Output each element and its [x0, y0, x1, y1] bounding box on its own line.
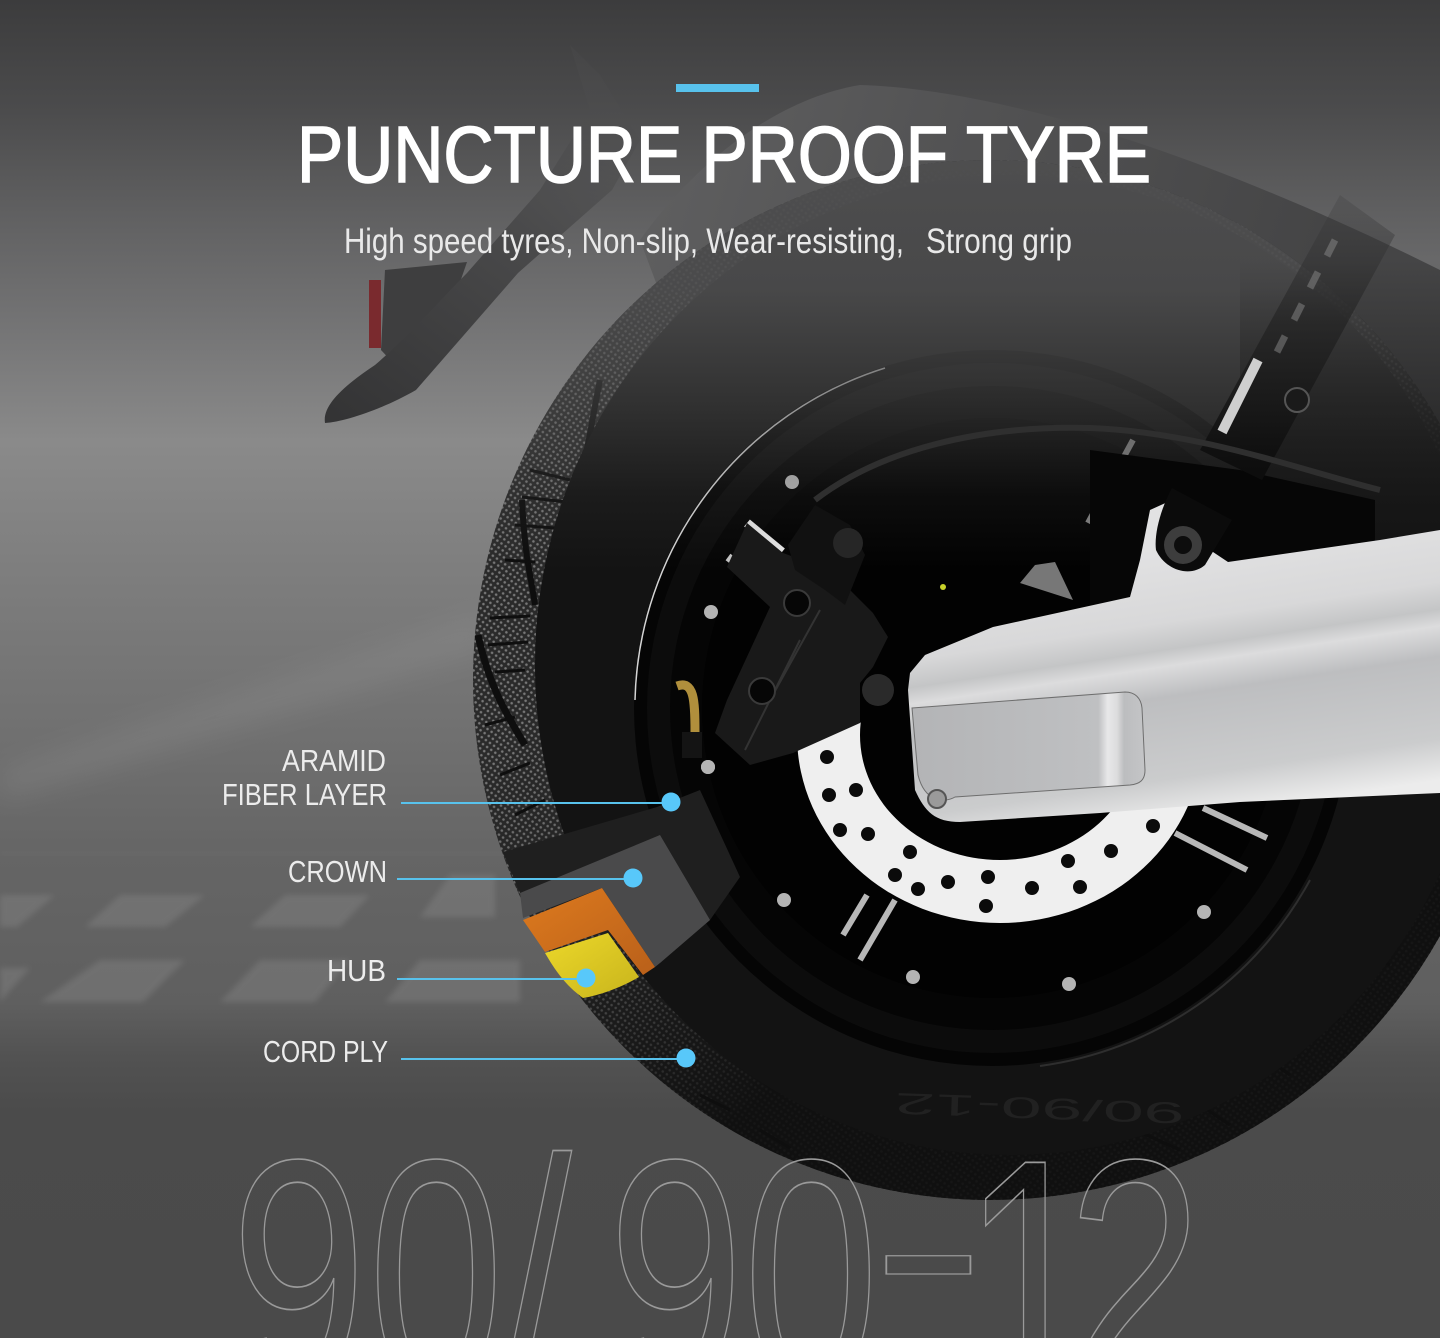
- callout: crown: [288, 854, 642, 889]
- tyre sidewall: [535, 175, 1440, 1155]
- mudguard and tail light: [325, 45, 640, 423]
- brake caliper: [701, 505, 894, 774]
- dark frame area right of shock: [1240, 260, 1440, 560]
- inner wedge: [1020, 562, 1073, 600]
- wheel: [473, 160, 1440, 1200]
- outlined tyre size: [231, 1130, 1203, 1338]
- accent bar: [676, 84, 759, 92]
- brake disc: [798, 722, 1188, 923]
- callout: aramid fiber layer: [222, 743, 680, 812]
- callout: aramid fiber layer: FIBER LAYER: [222, 777, 387, 812]
- frame body behind tyre: [640, 85, 1440, 620]
- rim: [634, 350, 1350, 1066]
- rim highlight arc: [635, 368, 885, 700]
- sidewall marking: 90/90-12: [894, 1086, 1185, 1129]
- callout: hub: [327, 953, 596, 988]
- swingarm cover plate: [912, 692, 1145, 800]
- tread grooves: [478, 380, 1390, 1150]
- sensor: [940, 584, 946, 590]
- swingarm: [908, 488, 1440, 822]
- top fade over tyre: [473, 160, 1440, 1200]
- tyre with tread: [473, 160, 1440, 1200]
- rim bolts: [701, 475, 1211, 991]
- callout: aramid fiber layer: ARAMID: [282, 743, 386, 778]
- black gap above swingarm: [1090, 450, 1375, 610]
- tyre cross-section layers: [503, 790, 740, 998]
- swingarm mount bolt: [1156, 488, 1232, 571]
- title: PUNCTURE PROOF TYRE: [297, 110, 1151, 199]
- callout: cord ply: CORD PLY: [263, 1034, 388, 1069]
- rim lower gloss: [1040, 880, 1310, 1066]
- subtitle: Strong grip: [926, 222, 1072, 261]
- brake hose: [815, 428, 1380, 500]
- shock absorber: [1200, 195, 1395, 480]
- aramid layer orange: [523, 888, 655, 975]
- rim spoke highlights: [728, 440, 1267, 960]
- valve stem: [677, 685, 702, 758]
- subtitle: High speed tyres, Non-slip, Wear-resisting,: [344, 222, 904, 261]
- callout: cord ply: [263, 1034, 696, 1069]
- crown layer: [520, 835, 710, 967]
- cord ply layer: [503, 790, 740, 963]
- callout: crown: CROWN: [288, 854, 387, 889]
- callout: hub: HUB: [327, 953, 386, 988]
- hub layer yellow: [545, 933, 639, 998]
